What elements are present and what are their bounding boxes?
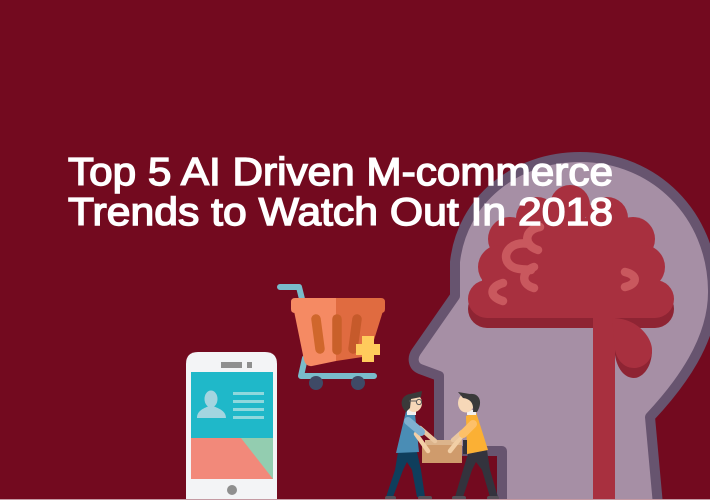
man with glasses bbox=[385, 391, 435, 500]
collar bbox=[467, 410, 476, 415]
title: Top 5 AI Driven M-commerce bbox=[68, 151, 613, 194]
brain folds bbox=[492, 227, 635, 301]
shoes bbox=[452, 496, 499, 500]
face bbox=[458, 394, 474, 412]
shirt bbox=[396, 411, 419, 453]
phone screen salmon panel bbox=[191, 438, 273, 479]
head silhouette bbox=[414, 157, 710, 500]
profile text lines bbox=[233, 392, 264, 419]
title: Trends to Watch Out In 2018 bbox=[68, 191, 613, 234]
phone screen green panel bbox=[241, 438, 273, 479]
cart rim bbox=[291, 298, 336, 313]
sleeve bbox=[463, 424, 473, 434]
far arm bbox=[420, 428, 435, 441]
trousers bbox=[386, 452, 425, 497]
arms bbox=[450, 428, 468, 451]
neck and collar bbox=[407, 409, 416, 415]
phone camera bbox=[247, 362, 252, 368]
phone home button bbox=[227, 485, 237, 495]
title bbox=[68, 151, 613, 234]
cart handle and frame bbox=[280, 287, 374, 376]
cart basket bbox=[294, 311, 336, 366]
cart wheels bbox=[309, 376, 365, 390]
phone bbox=[186, 352, 277, 500]
phone screen header bbox=[191, 372, 273, 438]
sleeve bbox=[408, 421, 421, 432]
icon: shopping cart bbox=[280, 287, 385, 390]
man in yellow shirt bbox=[450, 392, 499, 500]
icon: plus bbox=[356, 336, 380, 362]
people carrying box bbox=[385, 391, 499, 500]
brain bbox=[468, 185, 674, 500]
brain lobes bbox=[468, 185, 674, 500]
near arm bbox=[416, 434, 428, 451]
phone body bbox=[186, 352, 277, 500]
icon: user avatar bbox=[197, 390, 226, 418]
hair bbox=[458, 392, 480, 412]
glasses bbox=[409, 399, 422, 405]
cart slots bbox=[316, 319, 357, 350]
hair bbox=[402, 391, 422, 412]
box bbox=[422, 440, 462, 463]
shirt bbox=[466, 412, 488, 454]
phone speaker bbox=[221, 362, 242, 368]
brain shadow bbox=[468, 290, 674, 378]
shoes bbox=[385, 496, 432, 500]
trousers bbox=[455, 450, 498, 497]
face bbox=[406, 394, 422, 412]
bottom edge strip bbox=[0, 499, 710, 500]
